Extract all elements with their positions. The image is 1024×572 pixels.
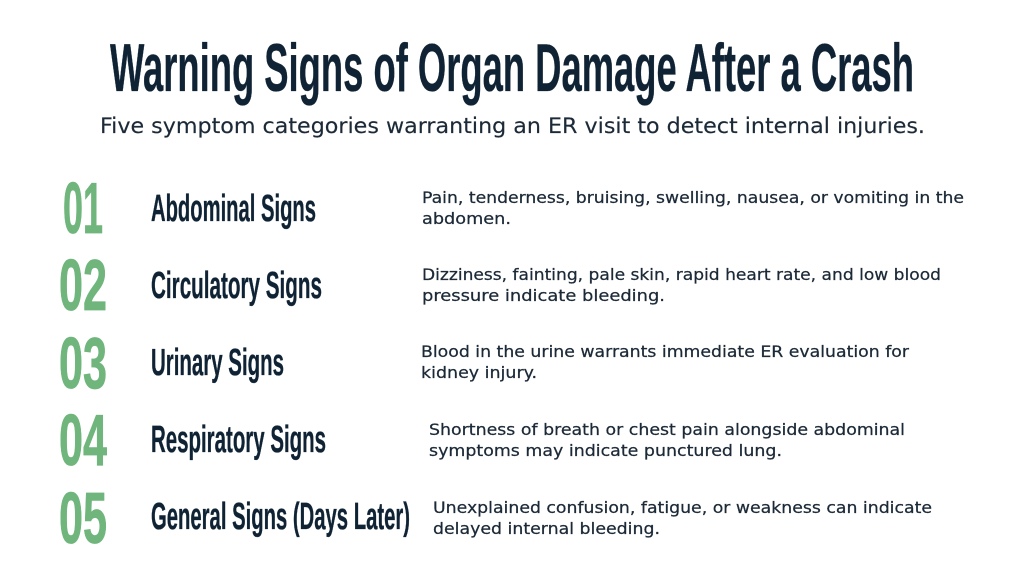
description: urinary signs: kidney injury. <box>421 363 537 382</box>
description: general signs: Unexplained confusion, fatigue, or weakness can indicate <box>433 498 932 517</box>
row 4: respiratory signs <box>59 401 905 481</box>
number 02: 02 <box>59 246 107 326</box>
number 05: 05 <box>59 479 107 559</box>
description: abdominal signs: Pain, tenderness, bruising, swelling, nausea, or vomiting in the <box>422 188 964 207</box>
description: urinary signs: Blood in the urine warrants immediate ER evaluation for <box>421 342 909 361</box>
description: respiratory signs: symptoms may indicate punctured lung. <box>429 441 782 460</box>
description: circulatory signs <box>422 265 941 305</box>
number 04: 04 <box>59 401 107 481</box>
heading: urinary signs: Urinary Signs <box>151 342 284 384</box>
heading: abdominal signs: Abdominal Signs <box>151 188 316 230</box>
heading: respiratory signs: Respiratory Signs <box>151 419 326 461</box>
description: urinary signs <box>421 342 909 382</box>
description: circulatory signs: pressure indicate bleeding. <box>422 286 665 305</box>
row 3: urinary signs <box>59 324 909 404</box>
subtitle: Five symptom categories warranting an ER visit to detect internal injuries. <box>100 114 925 139</box>
description: respiratory signs <box>429 420 905 460</box>
row 1: abdominal signs: 01 <box>63 169 103 249</box>
description: abdominal signs: abdomen. <box>422 209 511 228</box>
heading: circulatory signs: Circulatory Signs <box>151 265 322 307</box>
description: abdominal signs <box>422 188 964 228</box>
row 2: circulatory signs <box>59 246 941 326</box>
description: general signs: delayed internal bleeding. <box>433 519 660 538</box>
row 5: general signs <box>59 479 932 559</box>
row 1: abdominal signs <box>63 169 964 249</box>
description: circulatory signs: Dizziness, fainting, pale skin, rapid heart rate, and low blood <box>422 265 941 284</box>
description: general signs <box>433 498 932 538</box>
number 03: 03 <box>59 324 107 404</box>
description: respiratory signs: Shortness of breath or chest pain alongside abdominal <box>429 420 905 439</box>
heading: general signs: General Signs (Days Later) <box>151 496 410 538</box>
